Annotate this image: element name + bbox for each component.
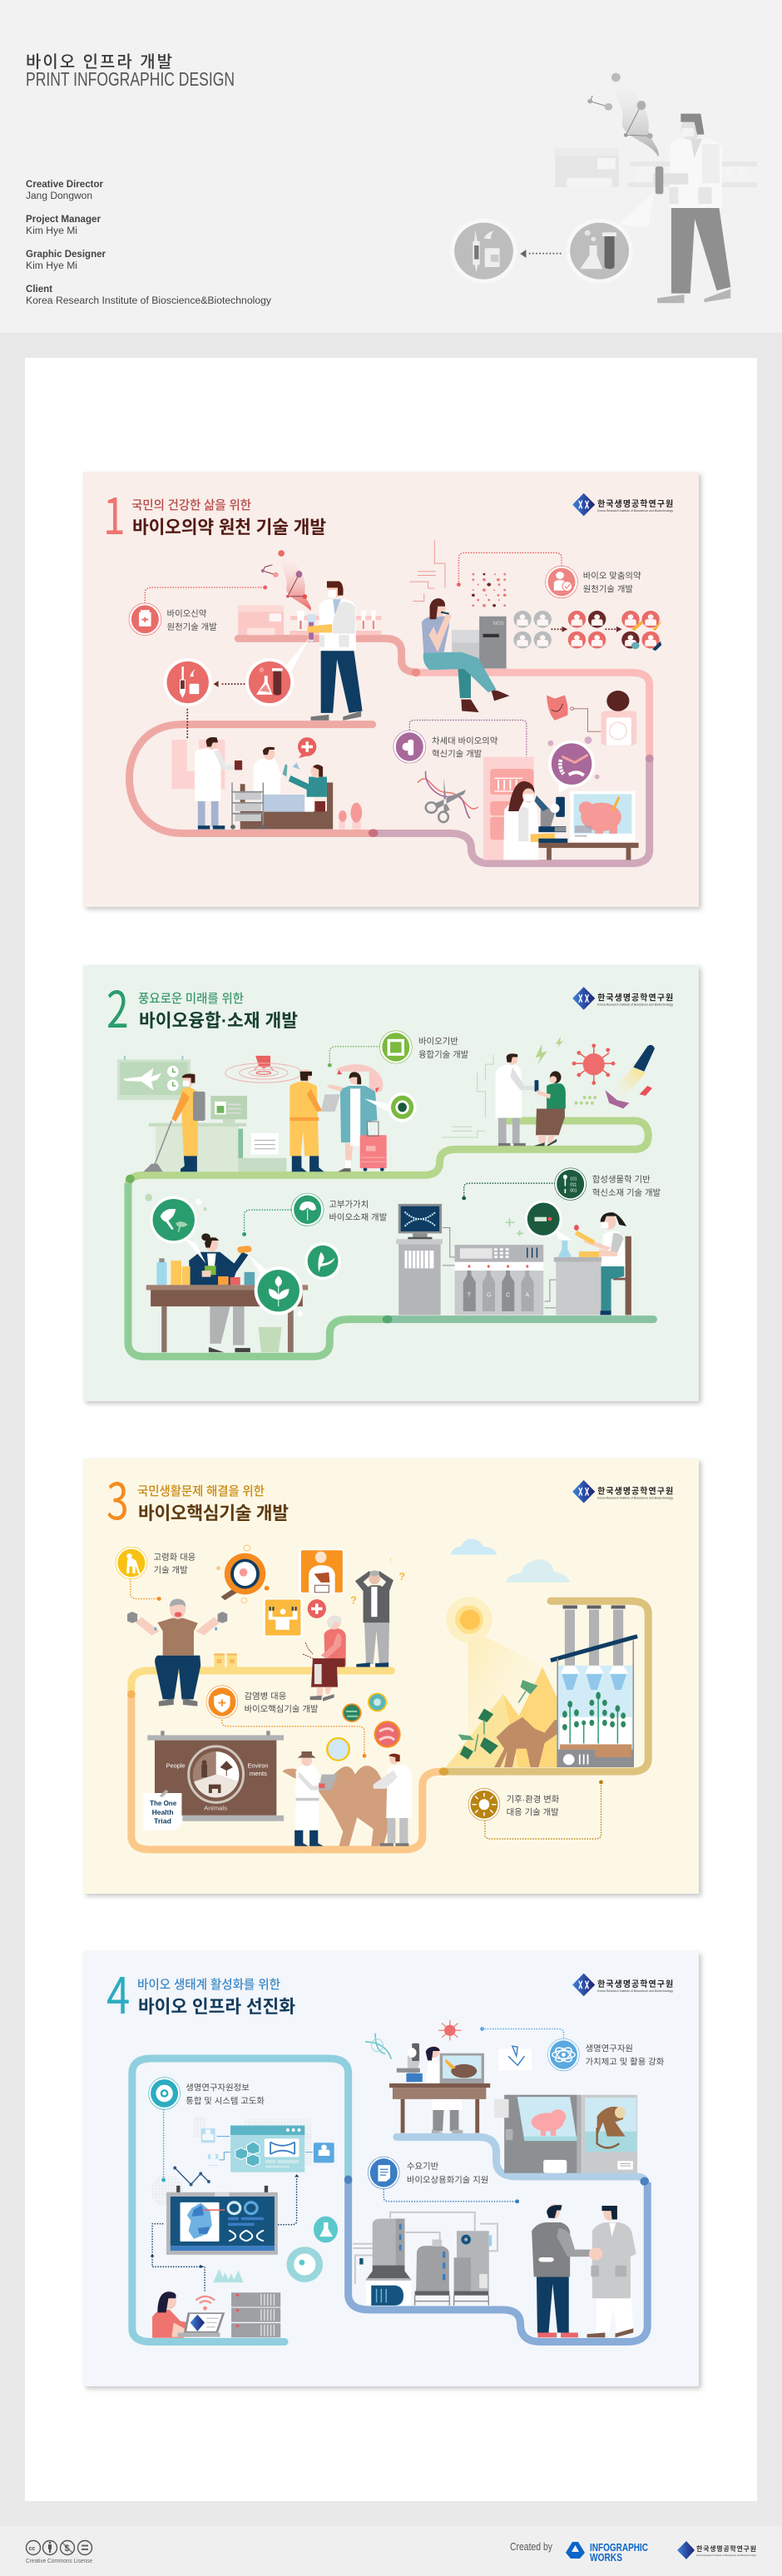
footer band [0,2526,782,2576]
footer institute logo [677,2541,757,2559]
institute logo: Korea Research Institute of Bioscience and Biotechnology [597,1989,673,1993]
DNA synthesizer machines: A [525,1290,529,1298]
one health poster: Environ [247,1763,269,1769]
created by: INFOGRAPHIC [590,2541,648,2554]
page title [26,52,235,90]
cosmetic researcher at table [146,1233,308,1352]
icon label: ageing: 고령화 대응 [154,1553,196,1563]
icon label: next generation [393,720,528,775]
panel 1 background [83,472,699,907]
icon label: synthetic biology [462,1168,661,1200]
panel 1 heading [131,498,326,537]
patient grouping icons [513,611,661,651]
icon label: next generation: 혁신기술 개발 [432,750,483,760]
icon label: infectious disease: 바이오핵심기술 개발 [245,1705,319,1715]
institute logo: 한국생명공학연구원 [597,1485,673,1496]
scientist with test tube [307,581,363,721]
institute logo: Korea Research Institute of Bioscience and Biotechnology [597,1496,673,1499]
ward scene: doctors, bed and patient [171,737,362,830]
panel 3 heading [137,1484,289,1523]
DNA synthesizer machines: C [506,1290,511,1298]
NGS machine [452,617,507,668]
icon label: high value materials: 고부가가치 [329,1200,369,1210]
process track [127,1601,648,1850]
footer institute logo: 한국생명공학연구원 [696,2544,756,2553]
institute logo: Korea Research Institute of Bioscience and Biotechnology [597,509,673,513]
credits: Korea Research Institute of Bioscience&Biotechnology [26,296,271,306]
process circles [164,638,309,748]
panel 1: biopharma [83,472,699,907]
one health poster [147,1731,284,1821]
desert camel and plants [458,1680,567,1767]
panel 1 heading: 국민의 건강한 삶을 위한 [131,498,251,513]
one health poster: ments [250,1771,267,1777]
production equipment [353,2212,497,2306]
elderly couple: ! [389,1556,392,1564]
icon label: convergence [328,1031,469,1068]
panel 2 background [83,965,699,1401]
process track [126,1121,654,1356]
panel 3 heading: 바이오핵심기술 개발 [138,1503,289,1523]
creative commons license [26,2541,92,2564]
icon label: climate: 대응 기술 개발 [507,1808,559,1818]
flask and gear blobs [213,2217,338,2282]
icon label: ageing: 기술 개발 [154,1565,188,1575]
doctor and patient [442,1053,566,1146]
elderly couple: ? [398,1570,405,1583]
panel 4 background [83,1951,699,2386]
credits: Kim Hye Mi [26,261,77,271]
icon label: biological resources: 생명연구자원 [586,2043,633,2053]
icon label: personalized medicine: 원천기술 개발 [583,585,633,595]
panel 4: bio infrastructure [83,1951,699,2386]
DNA synthesizer machines: T [468,1290,472,1298]
icon label: resource information [149,2078,265,2182]
icon label: commercialization: 바이오상용화기술 지원 [407,2175,488,2185]
panel 4 heading [137,1978,295,2017]
map monitor [151,2175,278,2255]
NGS machine: NGS [493,622,504,627]
process track [132,2058,649,2342]
icon label: synthetic biology: 001 [570,1189,577,1194]
credits: Graphic Designer [26,250,106,260]
institute logo [572,1480,673,1503]
body organ and exercise cards [263,1549,345,1637]
the one health triad note [143,1790,181,1830]
elderly couple: ? [350,1594,357,1607]
panel 2: bio convergence [83,965,699,1401]
icon label: resource information: 통합 및 시스템 고도화 [186,2097,265,2107]
machine and test tube racks [238,606,381,635]
clouds [451,1539,570,1583]
institute logo: 한국생명공학연구원 [597,498,673,509]
icon label: biological resources: 가치제고 및 활용 강화 [586,2057,665,2068]
icon label: biological resources [480,2027,665,2071]
molecule vapour [261,550,311,611]
page title: PRINT INFOGRAPHIC DESIGN [26,68,235,90]
worker spraying [143,1073,205,1172]
icon label: climate [468,1780,603,1839]
panel 2 heading: 풍요로운 미래를 위한 [138,992,244,1006]
animal cages [494,2095,637,2173]
created by: WORKS [590,2551,622,2564]
DNA, virus and note [365,2020,532,2070]
created by [510,2541,648,2564]
credits: Kim Hye Mi [26,226,77,236]
footer institute logo: Korea Research Institute of Bioscience and Biotechnology [696,2554,757,2557]
flight board [117,1056,191,1100]
panel 4 heading: 바이오 생태계 활성화를 위한 [137,1978,280,1992]
pathogen circles [326,1692,401,1761]
creative commons license: $ [65,2544,70,2554]
panel 2 heading: 바이오융합·소재 개발 [139,1011,298,1031]
institute logo: 한국생명공학연구원 [597,993,673,1003]
elderly couple [303,1556,405,1702]
panel 1 number: 1 [103,476,126,549]
elderly man lifting dumbbells [127,1598,237,1707]
icon label: synthetic biology: 합성생물학 기반 [592,1175,651,1185]
creative commons license: cc [28,2546,35,2552]
icon label: synthetic biology: 혁신소재 기술 개발 [592,1188,661,1198]
icon label: resource information: 생명연구자원정보 [186,2083,250,2093]
lab technician with pipette [558,1212,631,1315]
panel 4 heading: 바이오 인프라 선진화 [138,1997,295,2017]
bacteria bubble [548,736,600,793]
credits: Client [26,285,52,295]
panel 4 drawing [132,1974,673,2342]
virus bubble [364,1092,417,1122]
icon label: high value materials: 바이오소재 개발 [329,1212,388,1222]
panel 2 drawing [117,987,673,1356]
icon label: high value materials [242,1193,388,1236]
leaf bubbles [145,1194,341,1316]
icon label: new biodrug: 원천기술 개발 [167,622,217,632]
credits: Creative Director [26,180,104,190]
credits: Project Manager [26,215,101,225]
panel 4 number: 4 [106,1956,130,2029]
header band [0,0,782,333]
panel 1 drawing [129,493,673,864]
handshake businessmen [532,2204,636,2337]
server rack [231,2292,280,2337]
smart greenhouse [551,1605,637,1767]
DNA synthesizer machines: G [487,1290,492,1298]
organ and woman bust [547,691,636,746]
one health poster: Animals [204,1806,228,1812]
icon label: ageing [116,1547,196,1601]
line chart [173,2166,210,2187]
desk and monitor [149,1096,286,1172]
institute logo [572,987,673,1010]
panel 3 heading: 국민생활문제 해결을 위한 [137,1484,265,1499]
woman sitting with swab [422,598,509,712]
icon label: infectious disease [206,1686,366,1758]
data flow arrows [151,2174,299,2291]
worker and traveller [290,1064,387,1172]
created by: Created by [510,2541,553,2553]
institute logo [572,1974,673,1996]
process track [129,638,654,864]
data window with DNA [194,2117,334,2172]
institute logo: 한국생명공학연구원 [597,1979,673,1989]
icon label: synthetic biology: 101 [570,1177,577,1181]
icon label: synthetic biology: 011 [570,1183,577,1188]
icon label: personalized medicine: 바이오 맞춤의약 [583,571,641,581]
virus and flashlight [572,1043,655,1109]
header grey illustration [450,73,757,303]
the one health triad note: Triad [154,1817,171,1825]
circuit lines and DNA data dots [409,541,507,607]
icon label: new biodrug [129,586,267,636]
the one health triad note: Health [152,1809,174,1816]
page title: 바이오 인프라 개발 [26,52,172,72]
panel 1 heading: 바이오의약 원천 기술 개발 [132,518,326,537]
magnifier [216,1545,270,1603]
icon label: infectious disease: 감염병 대응 [245,1692,286,1702]
researcher with microscope and rat [389,2043,490,2133]
icon label: convergence: 바이오기반 [418,1037,458,1047]
one health poster: People [166,1763,186,1769]
panel 2 heading [138,992,298,1031]
icon label: commercialization: 수요기반 [407,2162,439,2172]
white card [25,358,757,2501]
monitor with test pig [570,791,636,841]
robot scanner [225,1056,302,1082]
credits: Jang Dongwon [26,191,92,201]
institute logo [572,493,673,516]
creative commons license: Creative Commons Lisense [26,2557,92,2564]
DNA and scissors [418,771,478,822]
panel 2 number: 2 [106,969,129,1043]
panel 3 number: 3 [106,1461,129,1534]
lightning bolts [536,1037,563,1064]
icon label: new biodrug: 바이오신약 [167,609,207,619]
woman with laptop [152,2291,225,2338]
desert pyramids [446,1667,559,1767]
DNA synthesizer machines [396,1204,602,1315]
the one health triad note: The One [150,1800,177,1807]
icon label: next generation: 차세대 바이오의약 [432,736,498,746]
icon label: commercialization [368,2157,519,2203]
lab shelf [483,757,534,860]
panel 3 drawing [116,1480,673,1850]
sun [446,1597,542,1763]
icon label: convergence: 융합기술 개발 [418,1050,469,1060]
vets and camel [283,1751,412,1846]
panel 3 background [83,1459,699,1894]
circuit bubble [506,1201,573,1241]
icon label: climate: 기후·환경 변화 [507,1794,560,1805]
institute logo: Korea Research Institute of Bioscience and Biotechnology [597,1003,673,1007]
panel 3: core bio technologies [83,1459,699,1894]
scientist at microscope [503,781,639,860]
icon label: personalized medicine [457,552,641,598]
credits [26,180,271,306]
